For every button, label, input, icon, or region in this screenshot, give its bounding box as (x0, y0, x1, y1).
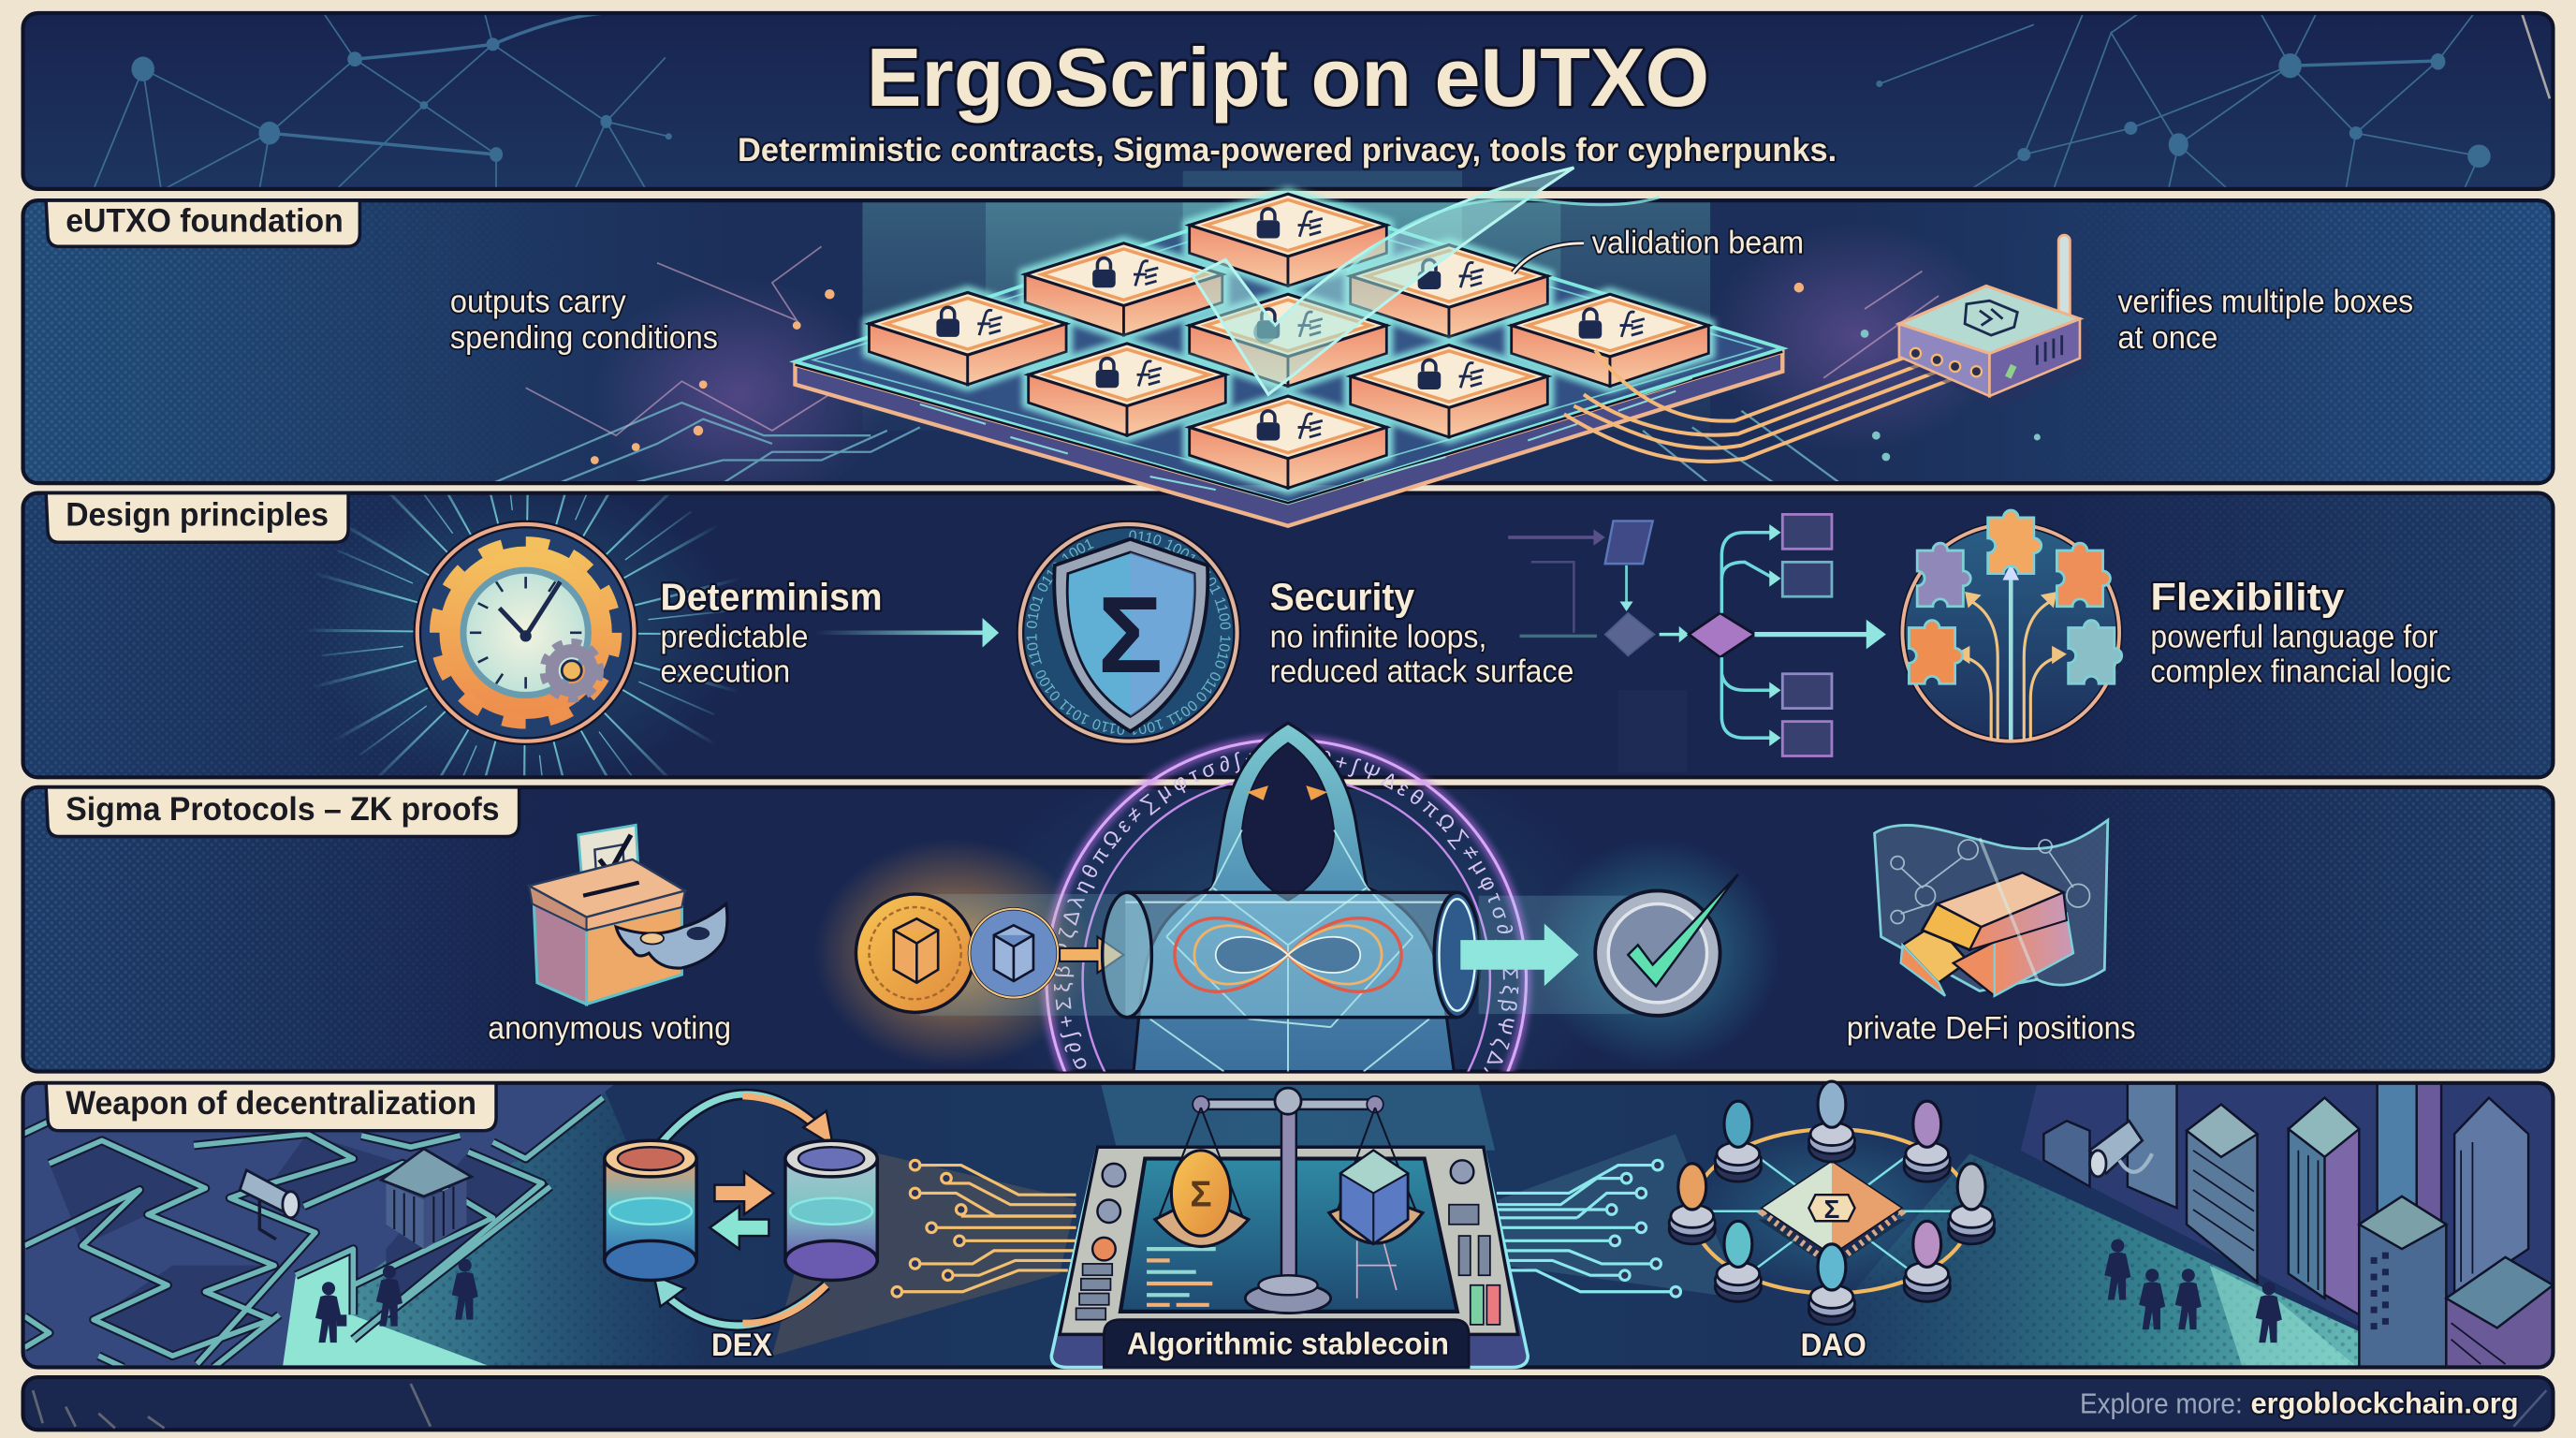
panel: Design principles (24, 494, 2552, 775)
panel: Sigma Protocols (24, 789, 2552, 1069)
icon: verified check medallion (1460, 838, 1781, 1068)
icon: ballot box and mask (529, 825, 727, 1005)
clock rays (361, 468, 690, 797)
icon: DAO chip and node ring: Σ (1824, 1195, 1839, 1224)
panel: footer bar (23, 1377, 2553, 1430)
figures right (2104, 1240, 2282, 1343)
heading: Flexibility: powerful language for (2150, 620, 2438, 655)
tab: Sigma Protocols: Sigma Protocols – ZK proofs (66, 791, 500, 828)
UTXO box grid (869, 194, 1708, 488)
heading: Determinism: Determinism (661, 575, 882, 618)
tab: Design principles: Design principles (66, 497, 329, 534)
icon: maze camera (240, 1170, 299, 1240)
panel: Weapon of decentralization (23, 1083, 2553, 1368)
hooded figure with rune ring: Σ λ ∂ + ∫ Ψ ∆ ε θ π Ω ∑ ≠ μ φ τ σ ∂ ∫ + Σ ξ β Ψ ζ ∆ λ η θ π Ω ε ≠ ∑ μ φ τ σ ∂ ∫ + Σ ξ β λ Ψ ∆ ε θ π Ω ∑ ≠ μ φ τ σ ∂ ∫ + Σ ξ β Ψ ζ ∆ λ η θ π Ω ε ≠ ∑ μ φ τ σ ∂ ∫ + ξ (1054, 751, 1518, 1071)
label: DEX: DEX (711, 1328, 772, 1363)
icon: DAO chip and node ring (1669, 1081, 1995, 1325)
platform slab (795, 198, 1782, 526)
validation beam glow (862, 200, 1710, 431)
isometric platform with UTXO boxes (795, 168, 1782, 526)
teal circuit traces (1497, 1160, 1680, 1297)
heading: Security: no infinite loops, (1270, 620, 1486, 655)
icon: puzzle tree medallion (1902, 510, 2122, 741)
icon: sigma shield medallion: 0110 1001 0101 1100 1010 0110 0011 1001 0110 1011 0100 1101 0101 0110 1001 (1026, 530, 1231, 735)
heading: Flexibility: Flexibility (2150, 575, 2345, 618)
orange circuit traces (892, 1160, 1076, 1297)
label: outputs carry spending conditions: outputs carry (450, 285, 627, 320)
label: outputs carry spending conditions: spending conditions (450, 320, 718, 356)
icon: clock and gear medallion (417, 524, 634, 741)
label: anonymous voting: anonymous voting (488, 1010, 731, 1046)
network decoration left (94, 13, 672, 189)
label: private DeFi positions: private DeFi positions (1847, 1010, 2136, 1046)
tab: eUTXO foundation: eUTXO foundation (66, 203, 344, 240)
zero-knowledge tunnel (1103, 892, 1480, 1018)
heading: Flexibility: complex financial logic (2150, 654, 2452, 690)
label: outputs carry spending conditions (450, 285, 718, 356)
tab: Weapon of decentralization: Weapon of decentralization (66, 1085, 476, 1122)
validation check mark beam (1193, 168, 1660, 394)
section tabs (46, 200, 520, 1131)
balance scale: Σ (1190, 1174, 1212, 1214)
heading: Security: reduced attack surface (1270, 654, 1573, 690)
hooded figure with rune ring (1039, 721, 1535, 1071)
label: validation beam with leader (1513, 225, 1804, 272)
title banner panel (23, 13, 2553, 189)
icon: temple bank (381, 1149, 472, 1249)
heading: Determinism (661, 575, 882, 690)
network decoration right (1876, 13, 2491, 189)
DAO nodes (1669, 1081, 1995, 1325)
balance scale (1155, 1088, 1423, 1313)
icon: city camera (2089, 1121, 2152, 1177)
arrow: determinism to security (815, 618, 999, 648)
icon: gold bars and private map (1875, 820, 2108, 996)
label: DAO: DAO (1801, 1328, 1866, 1363)
label: validation beam with leader: validation beam (1592, 225, 1804, 260)
city scene (1791, 1083, 2553, 1368)
label: verifies multiple boxes at once: verifies multiple boxes (2117, 285, 2413, 320)
heading: Security (1270, 575, 1573, 690)
circuit traces (493, 403, 1840, 483)
heading: Security: Security (1270, 575, 1415, 618)
footer link: ergoblockchain.org (2250, 1387, 2519, 1420)
title: ErgoScript on eUTXO (867, 32, 1709, 124)
heading: Determinism: execution (661, 654, 790, 690)
panel: eUTXO foundation (23, 200, 2553, 509)
footer link (2080, 1387, 2519, 1420)
light cones (772, 1083, 1741, 1356)
figures left (315, 1259, 478, 1343)
icon: node router with wires (1564, 235, 2089, 462)
icon: sigma shield medallion: Σ (1098, 574, 1163, 696)
icon: coins entering tunnel (813, 838, 1125, 1068)
footer link: Explore more: (2080, 1387, 2243, 1420)
label: Algorithmic stablecoin: Algorithmic stablecoin (1127, 1327, 1449, 1361)
heading: Determinism: predictable (661, 620, 809, 655)
hood and body (1134, 723, 1454, 1072)
icon: stablecoin tablet with balance scale (1051, 1088, 1528, 1368)
flowchart diagram (1508, 514, 1886, 772)
icon: DEX swap cylinders (605, 1094, 877, 1326)
heading: Flexibility (2150, 575, 2452, 690)
label: Algorithmic stablecoin (1104, 1320, 1469, 1368)
label: verifies multiple boxes at once (2117, 285, 2413, 356)
tab: Design principles (46, 493, 348, 542)
subtitle: Deterministic contracts, Sigma-powered privacy, tools for cypherpunks. (738, 132, 1837, 169)
orange wires (1564, 350, 1976, 462)
maze scene (23, 1083, 707, 1368)
label: verifies multiple boxes at once: at once (2117, 320, 2217, 356)
